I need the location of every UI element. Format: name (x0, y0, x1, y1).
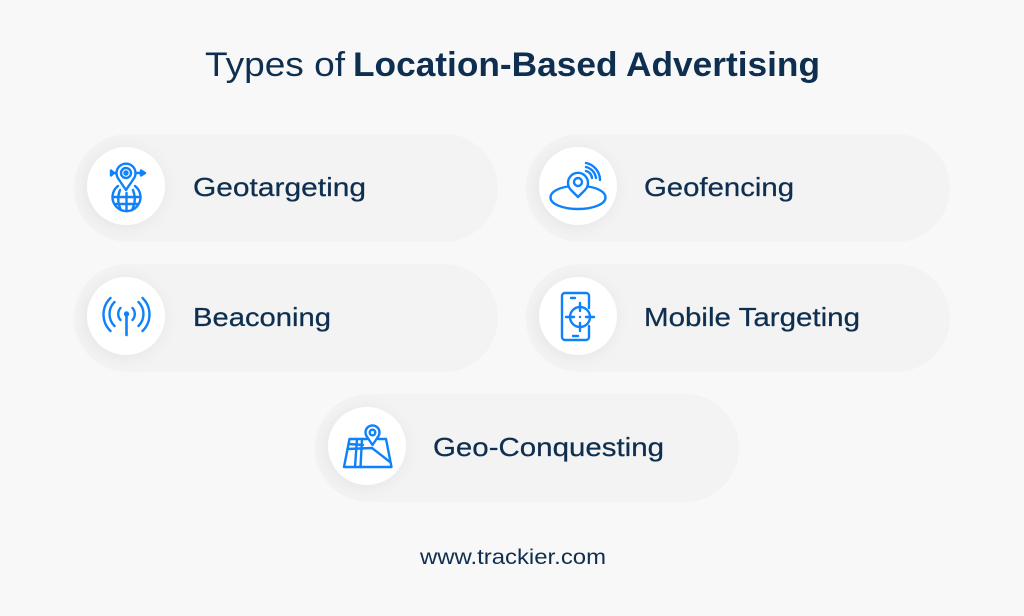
label: Beaconing (193, 302, 331, 332)
panel: Beaconing (74, 264, 498, 372)
panel: Mobile Targeting (526, 264, 950, 372)
icon: phone with crosshair (562, 293, 594, 340)
panel: Geotargeting (74, 134, 498, 242)
label: Geotargeting (193, 172, 366, 202)
label: Geo-Conquesting (433, 432, 664, 462)
panel: Geofencing (526, 134, 950, 242)
icon: beacon signal (104, 298, 149, 335)
title: Location-Based Advertising (353, 46, 820, 84)
title: Types of (205, 46, 346, 84)
label: Geofencing (644, 172, 794, 202)
icon: geofence pin (550, 163, 606, 209)
website url: www.trackier.com (419, 546, 606, 569)
icon: target pin over globe (111, 164, 145, 211)
icon: map with pin (344, 425, 392, 467)
panel: Geo-Conquesting (315, 394, 739, 502)
label: Mobile Targeting (644, 302, 860, 332)
